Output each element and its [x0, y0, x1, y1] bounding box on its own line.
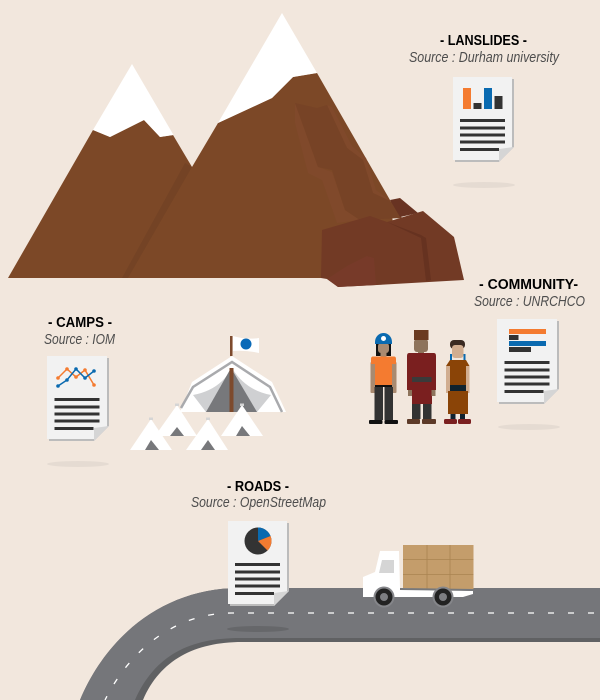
back rock [390, 198, 418, 217]
boulder highlight [327, 256, 376, 287]
heading: camps: Source : IOM [44, 332, 116, 348]
main tent [180, 356, 286, 412]
person: man in red robe [407, 330, 436, 424]
landslide scar [295, 103, 402, 220]
document icon: bar chart [453, 77, 514, 162]
rear wheel arch and wheel [374, 586, 394, 608]
heading: community [474, 277, 585, 310]
community people [369, 330, 471, 424]
heading: roads: - ROADS - [227, 479, 289, 495]
line chart: orange and blue series [56, 367, 96, 388]
landslide right fringe [327, 105, 392, 202]
heading: camps: - CAMPS - [48, 315, 112, 331]
chassis shadow [400, 588, 474, 591]
small tent: front right [186, 418, 228, 450]
small tent: back left [155, 404, 197, 436]
document icon: horizontal bars [497, 319, 559, 404]
document shadow: roads [227, 626, 289, 632]
document icon: line chart [47, 356, 109, 441]
flag [230, 336, 259, 356]
camp illustration [130, 336, 286, 450]
heading: camps [44, 315, 116, 348]
road surface [80, 588, 600, 700]
document shadow: camps [47, 461, 109, 467]
crease between the mountains [122, 163, 192, 278]
fallen boulders [321, 211, 464, 287]
right mountain [128, 73, 400, 278]
truck [363, 545, 474, 608]
heading: roads: Source : OpenStreetMap [191, 495, 326, 511]
cab window [379, 560, 394, 573]
heading: landslides: Source : Durham university [409, 50, 560, 66]
road centre dashes [105, 613, 600, 700]
front wheel arch and wheel [432, 586, 454, 608]
right mountain snow cap [218, 13, 317, 123]
heading: landslides: - LANSLIDES - [440, 33, 527, 49]
document shadow: community [498, 424, 560, 430]
small tent: back right [221, 404, 263, 436]
left mountain snow cap [93, 64, 174, 137]
truck cab and chassis [363, 551, 473, 597]
heading: landslides [409, 33, 560, 66]
document icon: pie chart [228, 521, 289, 606]
cargo boxes [403, 545, 474, 589]
landslide light layer [295, 103, 360, 223]
person: woman in brown dress [444, 340, 471, 424]
road inner shadow [80, 588, 600, 700]
mountains [8, 13, 464, 287]
boulder crack [387, 222, 431, 281]
road [80, 588, 600, 700]
document shadow: landslides [453, 182, 515, 188]
person: woman in hard hat [369, 333, 398, 424]
heading: roads [191, 479, 326, 511]
heading: community: - COMMUNITY- [479, 277, 578, 293]
left mountain [8, 120, 200, 278]
small tent: front left [130, 418, 172, 450]
